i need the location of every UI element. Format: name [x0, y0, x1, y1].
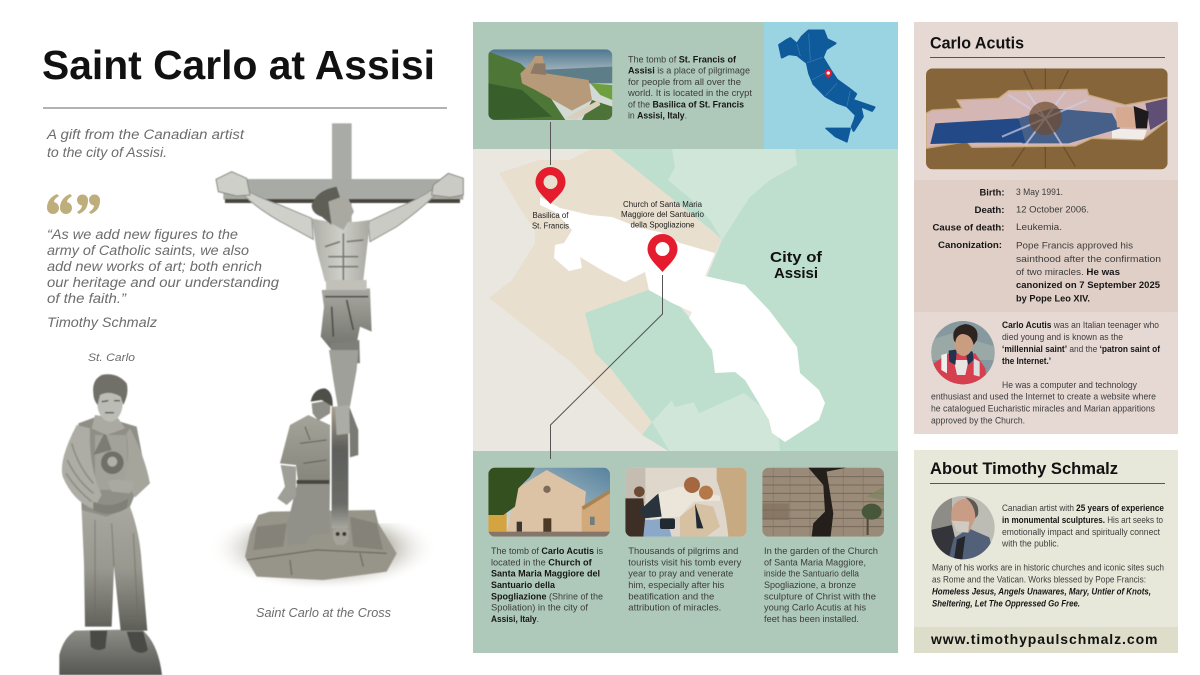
map green zone	[610, 149, 898, 452]
text: Carlo's tomb: located in the Church of	[491, 557, 592, 567]
upper crucifix	[216, 123, 463, 363]
text: pilgrims: attribution of miracles.	[628, 603, 721, 613]
statue sleeve	[62, 425, 102, 509]
text: pilgrims: tourists visit his tomb every	[628, 557, 742, 567]
text: sculpture: young Carlo Acutis at his	[764, 603, 867, 613]
statue base	[59, 629, 162, 675]
text: Carlo's tomb: Spogliazione (Shrine of the	[491, 591, 603, 601]
text: Carlo biography: died young and is known as the	[1002, 332, 1123, 342]
tomb opening	[926, 89, 1168, 148]
text: Carlo biography: he catalogued Eucharistic miracles and Marian apparitions	[931, 404, 1156, 414]
body	[1019, 108, 1120, 143]
statue collar	[92, 415, 125, 435]
map pin: Basilica	[536, 167, 566, 204]
left hand	[216, 172, 250, 196]
text: St. Francis tomb: Assisi is a place of pilgrimage	[628, 66, 750, 76]
text: Carlo's tomb: Assisi, Italy.	[491, 614, 539, 624]
text: sculpture: In the garden of the Church	[764, 546, 878, 556]
text: Carlo's tomb: Santa Maria Maggiore del	[491, 569, 600, 579]
heading: Carlo Acutis	[930, 34, 1024, 52]
panel: Italy locator map	[764, 22, 898, 149]
connector: photo to Basilica pin	[550, 122, 552, 165]
right arm	[368, 190, 435, 242]
text: pilgrims	[628, 546, 742, 613]
map white area: Assisi	[540, 197, 825, 442]
torso	[312, 218, 370, 282]
map label: Church	[621, 200, 705, 230]
statue shoes	[90, 631, 107, 650]
map label: Church: Church of Santa Maria	[623, 200, 703, 209]
text: St. Francis tomb: The tomb of St. Francis of	[628, 54, 736, 64]
panel: top band St. Francis	[473, 22, 764, 149]
kneeling figure pants	[287, 482, 330, 545]
kneeling figure head	[312, 400, 331, 421]
head	[322, 194, 354, 230]
photo: Church of Santa Maria Maggiore	[488, 468, 610, 537]
feet	[335, 405, 350, 435]
birth and death facts: sainthood after the confirmation	[1016, 254, 1161, 264]
panel: bottom band with churches	[473, 451, 898, 653]
photo: bronze sculpture	[762, 468, 884, 537]
text: Carlo's tomb	[491, 546, 604, 624]
subtitle: to the city of Assisi.	[47, 145, 167, 160]
subtitle: A gift from the Canadian artist	[46, 127, 245, 142]
text: artist biography: with the public.	[1001, 539, 1059, 549]
text: sculpture: Spogliazione, a bronze	[764, 580, 856, 590]
text: St. Francis tomb: of the Basilica of St. Francis	[628, 100, 744, 110]
birth and death facts: Leukemia.	[1016, 222, 1062, 232]
map label: City of Assisi	[770, 249, 823, 282]
birth and death facts: of two miracles. He was	[1016, 267, 1120, 277]
statue: crucifix with kneeling Carlo	[190, 123, 463, 623]
text: sculpture: sculpture of Christ with the	[764, 591, 876, 601]
mini pin	[825, 69, 832, 79]
loincloth	[321, 288, 372, 350]
icon: quotation marks	[47, 194, 100, 214]
quote: army of Catholic saints, we also	[47, 243, 250, 258]
quote: “As we add new figures to the	[47, 227, 238, 242]
statue hands	[93, 498, 128, 514]
text: Carlo biography: He was a computer and technology	[1002, 380, 1138, 390]
text: Carlo's tomb: Spoliation) in the city of	[491, 603, 589, 613]
text: Carlo biography: Carlo Acutis was an Italian teenager who	[1002, 320, 1159, 330]
quote	[47, 227, 280, 306]
kneeling figure body	[280, 415, 330, 483]
left arm	[243, 188, 313, 239]
statue caption: Saint Carlo at the Cross	[256, 606, 391, 620]
birth and death facts: Pope Francis approved his	[1016, 241, 1134, 251]
birth and death facts: Canonization:	[938, 240, 1002, 250]
birth and death facts	[914, 180, 1178, 312]
statue head	[97, 385, 123, 422]
birth and death facts: 3 May 1991.	[1016, 187, 1063, 197]
text: artist biography: emotionally impact and spiritually connect	[1002, 527, 1161, 537]
text: artist biography: Many of his works are in historic churches and iconic sites such	[932, 563, 1164, 573]
map central green	[585, 290, 744, 422]
portrait: Carlo	[930, 320, 997, 387]
cross bar	[223, 179, 463, 200]
photo: pilgrims	[625, 468, 747, 537]
kneeling figure arm	[277, 465, 296, 505]
birth and death facts: by Pope Leo XIV.	[1016, 293, 1090, 303]
photo: Carlo's tomb	[926, 68, 1168, 169]
photo: Basilica of St. Francis	[488, 49, 612, 120]
map beige zone	[489, 149, 722, 435]
shadow under base	[190, 523, 457, 623]
map label: Basilica	[532, 211, 569, 230]
text: St. Francis tomb: in Assisi, Italy.	[628, 110, 687, 120]
birth and death facts: 12 October 2006.	[1016, 204, 1089, 214]
statue: St. Carlo	[59, 374, 162, 675]
subtitle	[46, 127, 245, 160]
map label: Basilica: Basilica of	[532, 211, 569, 220]
map pin: Church	[648, 234, 678, 272]
connector: Church pin to lower photos	[550, 275, 662, 459]
text: pilgrims: year to pray and venerate	[628, 569, 733, 579]
statue label: St. Carlo: St. Carlo	[88, 352, 135, 364]
map background	[473, 149, 898, 452]
heading: About Timothy Schmalz	[930, 460, 1118, 478]
map label: Church: Maggiore del Santuario	[621, 210, 705, 219]
text: Carlo biography: approved by the Church.	[931, 416, 1025, 426]
cross upright	[332, 123, 352, 223]
text: artist biography: Sheltering, Let The Oppressed Go Free.	[932, 599, 1080, 609]
text: artist biography: Canadian artist with 25 years of experience	[1002, 503, 1164, 513]
birth and death facts: Death:	[974, 205, 1005, 215]
text: sculpture: feet has been installed.	[764, 614, 859, 624]
statue shirt	[78, 417, 145, 517]
text: Carlo biography: the Internet.’	[1002, 356, 1051, 366]
monstrance	[1002, 92, 1087, 145]
birth and death facts: Birth:	[980, 187, 1005, 197]
text: sculpture	[764, 546, 878, 624]
panel: About Timothy Schmalz	[914, 450, 1178, 653]
panel: Assisi map	[473, 149, 898, 452]
shins	[329, 350, 358, 410]
website footer	[914, 627, 1178, 653]
text: Carlo biography	[931, 320, 1160, 426]
birth and death facts: Cause of death:	[932, 223, 1005, 233]
text: Carlo's tomb: The tomb of Carlo Acutis is	[491, 546, 604, 556]
text: Carlo biography: enthusiast and used the Internet to create a website where	[931, 392, 1156, 402]
text: sculpture: inside the Santuario della	[764, 569, 859, 579]
website footer: www.timothypaulschmalz.com	[930, 631, 1158, 647]
quote attribution: Timothy Schmalz	[47, 315, 157, 330]
right hand	[432, 173, 463, 197]
birth and death facts: canonized on 7 September 2025	[1016, 280, 1160, 290]
statue legs	[82, 507, 147, 631]
skull	[333, 528, 349, 545]
text: pilgrims: him, especially after his	[628, 580, 725, 590]
map label: Church: della Spogliazione	[630, 220, 695, 230]
text: pilgrims: beatification and the	[628, 591, 714, 601]
text: artist biography	[932, 503, 1164, 609]
map label: Basilica: St. Francis	[532, 222, 569, 230]
lower crucifix	[245, 350, 397, 580]
text: sculpture: of Santa Maria Maggiore,	[764, 557, 866, 567]
statue medal	[101, 451, 124, 474]
quote: our heritage and our understanding	[47, 275, 280, 290]
text: pilgrims: Thousands of pilgrims and	[628, 546, 738, 556]
text: St. Francis tomb: world. It is located in the crypt	[627, 88, 753, 98]
statue hair	[93, 374, 127, 405]
portrait: Timothy	[930, 495, 997, 562]
text: Carlo biography: ‘millennial saint’ and the ‘patron saint of	[1002, 344, 1160, 354]
text: artist biography: as Rome and the Vatican. Works blessed by Pope Francis:	[932, 575, 1146, 585]
panel: Carlo Acutis	[914, 22, 1178, 434]
text: St. Francis tomb: for people from all over the	[628, 77, 741, 87]
map label: City of Assisi: Assisi	[774, 265, 818, 282]
text: Carlo's tomb: Santuario della	[491, 580, 555, 590]
text: artist biography: in monumental sculptures. His art seeks to	[1002, 515, 1163, 525]
cross lower beam	[332, 407, 348, 528]
base rubble	[245, 510, 397, 580]
Sicily	[826, 128, 850, 142]
title: Saint Carlo at Assisi	[42, 42, 435, 88]
quote: add new works of art; both enrich	[47, 259, 262, 274]
text: St. Francis tomb	[627, 54, 753, 120]
text: artist biography: Homeless Jesus, Angels Unawares, Mary, Untier of Knots,	[932, 586, 1151, 596]
Italy mainland	[779, 31, 874, 131]
map label: City of Assisi: City of	[770, 249, 823, 266]
thighs	[331, 340, 360, 363]
quote: of the faith.”	[47, 291, 127, 306]
